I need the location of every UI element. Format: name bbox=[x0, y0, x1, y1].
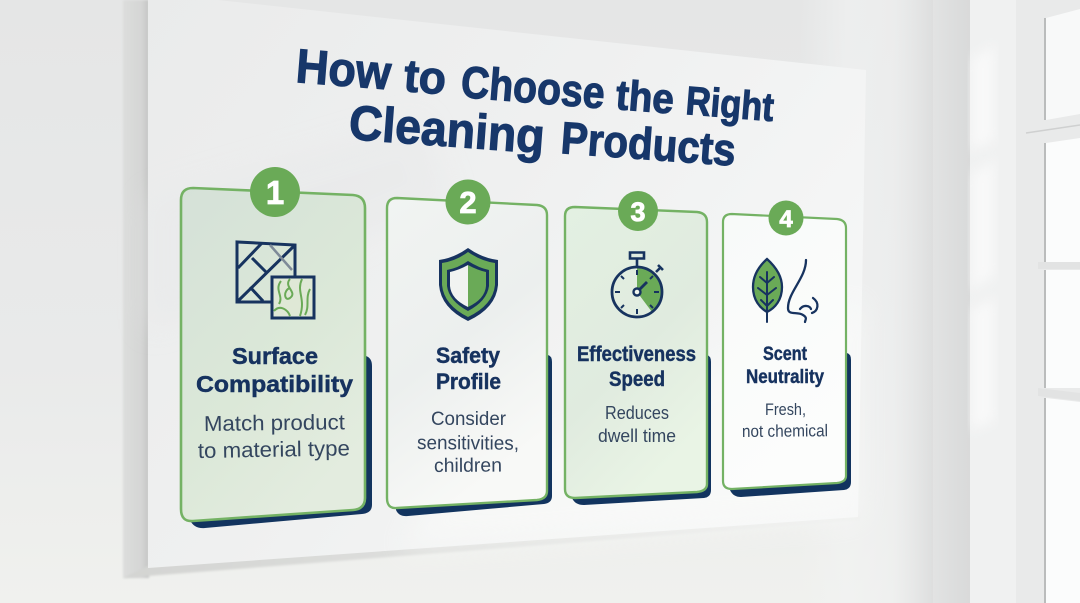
description: not chemical bbox=[742, 421, 828, 441]
number badge 4: 4 bbox=[779, 206, 793, 233]
card 4 shadow bbox=[730, 353, 851, 497]
heading: Safety bbox=[436, 343, 501, 368]
heading: Compatibility bbox=[196, 371, 353, 397]
title: Choose bbox=[459, 56, 607, 119]
panel: surface compatibility bbox=[181, 167, 372, 528]
heading: Neutrality bbox=[746, 366, 824, 388]
panel: effectiveness speed bbox=[565, 191, 711, 505]
poster board bbox=[148, 0, 866, 568]
panel: scent neutrality bbox=[723, 200, 851, 497]
number badge 3: 3 bbox=[630, 197, 646, 227]
title: Cleaning bbox=[347, 96, 547, 164]
wall pillar bbox=[933, 0, 970, 603]
number badge 4 bbox=[768, 200, 804, 236]
panel: safety profile bbox=[387, 180, 552, 516]
card 2 shadow bbox=[396, 355, 552, 516]
icon: leaf and nose bbox=[753, 259, 817, 322]
description: Fresh, bbox=[765, 400, 806, 419]
card 4 body bbox=[723, 214, 846, 489]
card 1 body bbox=[181, 188, 365, 521]
description bbox=[742, 400, 828, 441]
description: Match product bbox=[204, 410, 345, 436]
card 1 shadow bbox=[190, 356, 372, 528]
number badge 2 bbox=[446, 180, 490, 224]
heading bbox=[577, 343, 696, 391]
card 3 body bbox=[565, 207, 707, 498]
description: Consider bbox=[431, 408, 506, 430]
heading bbox=[436, 343, 501, 394]
poster cast shadow bbox=[123, 0, 860, 578]
description: children bbox=[434, 455, 502, 477]
heading: Effectiveness bbox=[577, 343, 696, 366]
heading: Surface bbox=[232, 343, 318, 369]
number badge 1 bbox=[250, 167, 300, 217]
title bbox=[294, 40, 776, 176]
title: Products bbox=[559, 112, 738, 176]
description: to material type bbox=[198, 436, 350, 463]
title: How bbox=[294, 40, 394, 101]
card 2 body bbox=[387, 198, 547, 508]
heading bbox=[196, 343, 353, 397]
icon: surface tiles bbox=[237, 242, 314, 318]
title: the bbox=[614, 71, 676, 123]
card 3 shadow bbox=[572, 355, 711, 505]
description: Reduces bbox=[605, 403, 669, 423]
description: sensitivities, bbox=[417, 432, 519, 455]
title: to bbox=[402, 49, 448, 104]
description bbox=[598, 403, 676, 446]
icon: stopwatch bbox=[612, 252, 663, 317]
heading: Speed bbox=[609, 368, 665, 391]
heading bbox=[746, 343, 824, 388]
description bbox=[198, 410, 350, 463]
title: Right bbox=[684, 79, 776, 130]
number badge 2: 2 bbox=[459, 185, 477, 220]
heading: Profile bbox=[436, 369, 501, 394]
number badge 1: 1 bbox=[266, 174, 284, 211]
description bbox=[417, 408, 519, 477]
window bbox=[1026, 0, 1080, 603]
icon: shield bbox=[439, 248, 498, 321]
side wall with sunlight bbox=[970, 0, 1026, 603]
description: dwell time bbox=[598, 426, 676, 446]
number badge 3 bbox=[618, 191, 658, 231]
heading: Scent bbox=[763, 343, 807, 365]
